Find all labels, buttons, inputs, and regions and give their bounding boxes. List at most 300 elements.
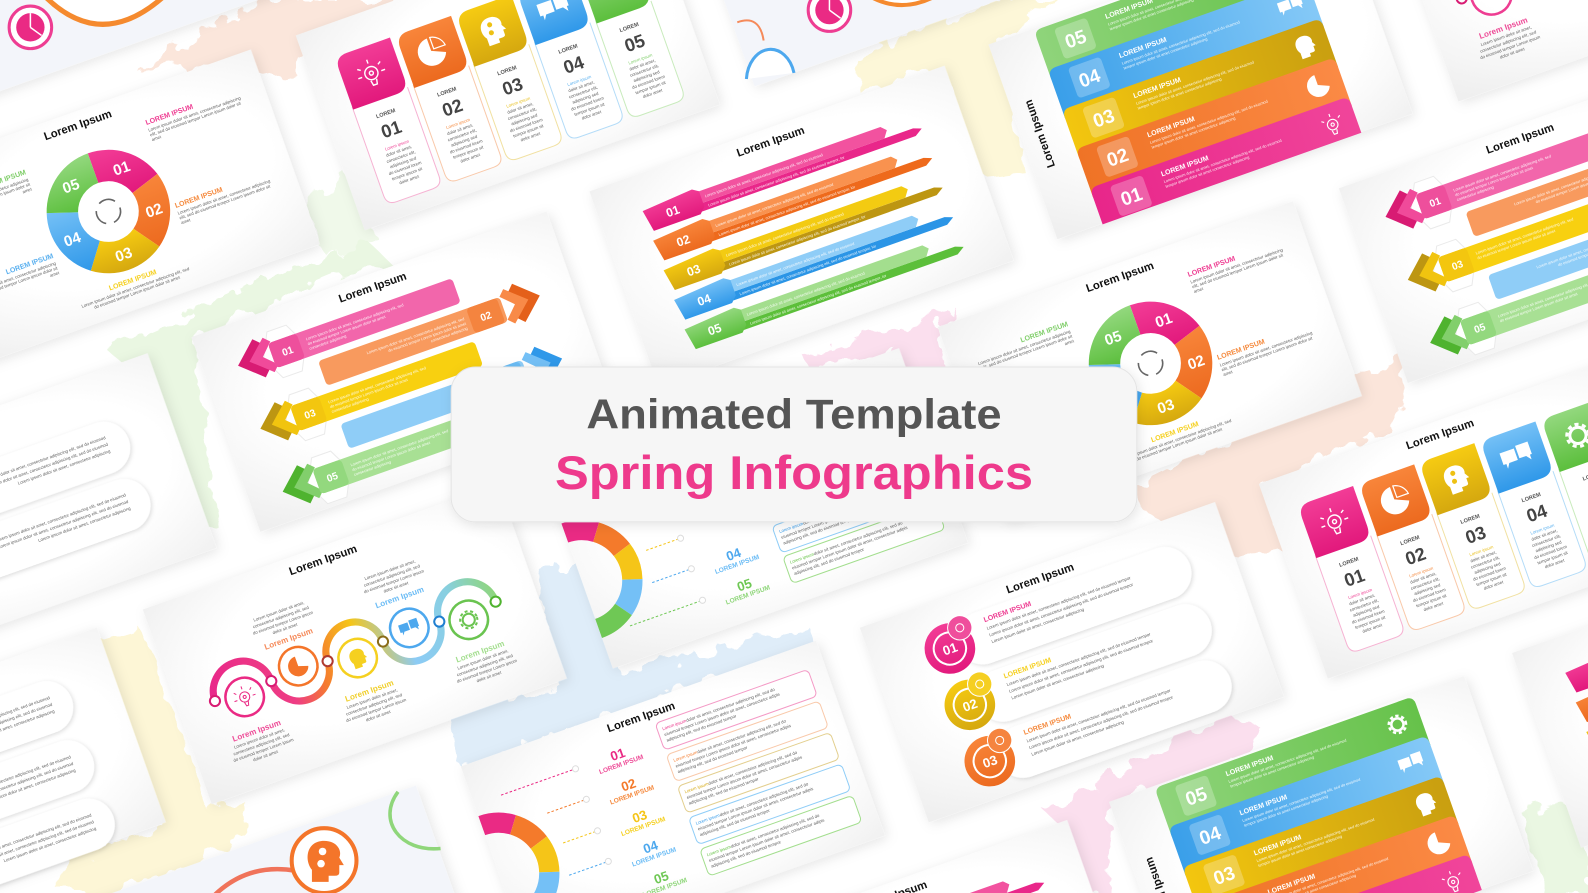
card 03: dolor amet	[520, 131, 542, 142]
card 04: adipiscing sed	[1535, 539, 1563, 553]
band 03	[1062, 18, 1338, 158]
row 05: consectetur adipiscing	[353, 459, 392, 477]
slide: colored stack bottom	[1109, 676, 1533, 893]
slide: top center circles fragment	[686, 0, 1110, 86]
card 03: consectetur elit,	[507, 106, 537, 121]
label 05: amet	[22, 186, 33, 194]
label 02: elit, sed do eiusmod tempor Lorem ipsum dolor sit	[179, 183, 272, 220]
card 02: dolor amet	[1423, 600, 1445, 612]
label 04: LOREM IPSUM	[5, 252, 55, 276]
donut chart: 04	[1104, 381, 1126, 403]
outlined box 01: adipiscing elit, sed do eiusmod tempor	[666, 713, 737, 743]
donut chart: 02	[1186, 352, 1207, 374]
label 01: Lorem ipsum dolor sit amet, consectetur adipiscing	[1190, 247, 1284, 285]
label 01	[1187, 238, 1287, 294]
labels: LOREM IPSUM	[620, 816, 667, 838]
slide: pills left upper	[0, 353, 216, 674]
card 02: dolor sit amet,	[1409, 571, 1437, 585]
card 02: 02	[440, 95, 465, 121]
bar 03	[662, 170, 945, 291]
pill 2: Lorem ipsum dolor sit amet, consectetur adipiscing	[37, 505, 132, 543]
card 05	[578, 0, 686, 119]
band 01: tempor ipsum dolor sit amet consectetur adipiscing	[1165, 155, 1250, 189]
row 03: consectetur adipiscing	[331, 396, 369, 414]
row 01	[1378, 119, 1588, 242]
outlined box 02: eiusmod tempor Lorem ipsum dolor sit amet, consectetur adipis	[675, 723, 792, 769]
card 04	[1480, 422, 1588, 589]
card 01: do eiusmod lorem	[1351, 608, 1386, 625]
outlined box 04: adipiscing elit, sed do eiusmod tempor	[699, 808, 771, 837]
text block: dolor sit amet	[1499, 46, 1526, 60]
band 04	[1168, 735, 1444, 876]
card 05: Lorem ipsum	[628, 52, 653, 66]
band 03: LOREM IPSUM	[1132, 76, 1182, 100]
slide: ring list bottom	[461, 641, 885, 893]
label 2	[248, 598, 320, 654]
card 01: Lorem ipsum	[1347, 587, 1373, 600]
bar 05: 05	[706, 321, 724, 339]
card 04: LOREM	[558, 43, 579, 56]
card 04: dolor sit amet,	[1531, 528, 1558, 542]
band 05: Lorem ipsum dolor sit amet, consectetur adipiscing elit, sed do eiusmod	[1228, 738, 1347, 784]
label 02	[174, 170, 275, 225]
label 03: LOREM IPSUM	[1150, 420, 1200, 444]
band 01: Lorem ipsum dolor sit amet, consectetur adipiscing elit, sed do eiusmod	[1163, 138, 1282, 184]
label 03: Lorem ipsum dolor sit amet, consectetur adipiscing elit, sed	[81, 266, 190, 309]
row 01: do eiusmod tempor Lorem ipsum dolor sit amet	[307, 314, 387, 346]
heading: Lorem Ipsum	[337, 270, 408, 306]
label 3: Lorem ipsum dolor sit amet,	[346, 687, 398, 710]
slide: wave timeline	[143, 484, 567, 804]
text block: Lorem ipsum dolor sit amet,	[1480, 25, 1532, 47]
outlined box 01: Lorem ipsum	[662, 718, 687, 731]
text block: consectetur adipiscing elit, sed	[1479, 29, 1537, 54]
step 5 icon	[444, 595, 493, 644]
label 02: Lorem ipsum dolor sit amet, consectetur adipiscing	[177, 178, 271, 216]
outlined box 05	[783, 503, 945, 584]
donut chart	[1072, 285, 1229, 442]
row 05: do eiusmod tempor Lorem ipsum dolor sit amet	[1499, 291, 1579, 323]
bar 03: Lorem ipsum dolor sit amet, consectetur adipiscing elit, sed do eiusmod tempor, lor	[728, 214, 867, 267]
card 03: do eiusmod lorem	[509, 117, 544, 133]
outlined box 04: adipiscing elit, sed do eiusmod tempor	[782, 516, 854, 546]
row 04: 04	[501, 373, 516, 387]
outlined box 02: adipiscing elit, sed do eiusmod tempor	[677, 745, 749, 774]
text block: do eiusmod tempor Lorem ipsum	[1479, 34, 1541, 60]
outlined box 03	[677, 732, 840, 813]
label 3	[338, 676, 409, 729]
title line 1: Animated Template	[586, 390, 1002, 437]
icon: blue arc	[746, 49, 794, 79]
bar 01: Lorem ipsum dolor sit amet, consectetur adipiscing elit, sed do eiusmod tempor, lor	[707, 154, 846, 208]
card 02: Lorem ipsum	[1408, 565, 1434, 579]
dashed leaders	[501, 770, 605, 888]
band 03: Lorem ipsum dolor sit amet, consectetur adipiscing elit, sed do eiusmod	[1256, 817, 1375, 863]
band 02: tempor ipsum dolor sit amet consectetur adipiscing	[1151, 115, 1236, 150]
pill 02: Lorem ipsum dolor sit amet, consectetur adipiscing elit, sed do eiusmod tempor	[1006, 631, 1152, 687]
row 03: do eiusmod tempor Lorem ipsum dolor sit amet	[329, 377, 409, 409]
pill 1	[0, 415, 137, 547]
label 4: Lorem ipsum dolor sit amet,	[364, 559, 416, 581]
pill 01: Lorem ipsum dolor sit amet, consectetur adipiscing elit, sed do eiusmod tempor	[986, 575, 1132, 631]
card 01: consectetur elit,	[386, 149, 416, 164]
card 05: dolor amet	[642, 87, 664, 99]
card 04: 04	[561, 52, 587, 78]
icon: small orange arc	[737, 20, 764, 40]
label 05	[0, 168, 33, 224]
icon: pink pie ring	[9, 6, 52, 49]
card 03: dolor sit amet,	[506, 101, 534, 115]
pill 01: 01	[941, 639, 959, 659]
label 01: elit, sed do eiusmod tempor Lorem ipsum dolor sit	[1191, 252, 1284, 289]
label 1: Lorem Ipsum	[231, 718, 282, 744]
bar 01	[641, 110, 924, 232]
pill 2	[0, 472, 158, 605]
row 03: do eiusmod tempor Lorem ipsum dolor sit amet	[1477, 228, 1557, 260]
slide: numbered pills	[860, 502, 1284, 822]
band 04: Lorem ipsum dolor sit amet, consectetur adipiscing elit, sed do eiusmod	[1121, 19, 1240, 66]
card 05: consectetur elit,	[629, 63, 660, 78]
label 01: amet	[1193, 286, 1205, 294]
card 04: tempor ipsum sit	[574, 101, 606, 117]
heading: Lorem Ipsum	[1405, 417, 1476, 452]
bar 05: Lorem ipsum dolor sit amet, consectetur adipiscing elit, sed do eiusmod tempor, lor	[749, 273, 888, 326]
labels: 05	[735, 575, 754, 594]
labels: LOREM IPSUM	[714, 554, 761, 576]
card 01: 01	[1342, 565, 1367, 591]
card 04: consectetur elit,	[568, 85, 598, 100]
donut chart: 03	[113, 244, 135, 266]
label 01: LOREM IPSUM	[145, 103, 194, 127]
dashed leaders	[608, 539, 700, 626]
slide: arrows right	[1339, 63, 1588, 383]
card 03	[456, 0, 564, 162]
icon: pink pie ring	[808, 0, 851, 31]
step 1 icon	[220, 672, 269, 722]
band 04: LOREM IPSUM	[1118, 36, 1168, 60]
outlined box 01: eiusmod tempor Lorem ipsum dolor sit amet, consectetur adipis	[664, 691, 781, 737]
band 05: 05	[1062, 26, 1090, 53]
row 03: 03	[303, 408, 318, 422]
label 5: Lorem ipsum dolor sit amet,	[457, 648, 509, 671]
band 02: 02	[1104, 145, 1132, 172]
label 1: consectetur adipiscing elit, sed	[233, 732, 291, 756]
card 02: consectetur elit,	[1410, 576, 1440, 591]
donut chart: 02	[143, 200, 165, 222]
wave path	[205, 574, 506, 729]
band 05: LOREM IPSUM	[1225, 754, 1275, 778]
label 03: do eiusmod tempor Lorem ipsum dolor sit amet	[93, 274, 181, 310]
card 03: adipiscing sed	[510, 112, 539, 126]
card 02	[396, 16, 503, 183]
band 02: LOREM IPSUM	[1146, 115, 1196, 139]
pill 03: Lorem ipsum dolor sit amet, consectetur adipiscing elit, sed do eiusmod tempor	[1026, 688, 1172, 743]
pill 03: Lorem ipsum dolor sit amet, consectetur adipiscing	[1031, 719, 1125, 757]
row 01: consectetur adipiscing	[309, 333, 347, 351]
row 03	[253, 331, 487, 454]
labels: LOREM IPSUM	[598, 754, 645, 776]
card 04: do eiusmod lorem	[1533, 544, 1568, 560]
card 04: LOREM	[1521, 492, 1542, 504]
slide: five cards right	[1259, 358, 1588, 679]
tab 02	[1574, 679, 1588, 723]
card 03: tempor ipsum sit	[1476, 571, 1508, 587]
donut chart	[30, 133, 187, 290]
band 04: tempor ipsum dolor sit amet consectetur adipiscing	[1123, 36, 1208, 71]
bar 03: Lorem ipsum dolor sit amet, consectetur adipiscing elit, sed do eiusmod	[725, 211, 844, 258]
card 03	[1419, 443, 1527, 611]
label 3: Lorem Ipsum	[344, 678, 395, 704]
card 03: tempor ipsum sit	[512, 123, 545, 139]
row 01: Lorem ipsum dolor sit amet, consectetur adipiscing elit, sed	[305, 302, 404, 341]
label 4	[359, 557, 431, 612]
card 03: dolor amet	[1483, 579, 1505, 591]
bar 04: 04	[696, 291, 713, 309]
card 04: dolor amet	[1544, 557, 1566, 569]
label 1: do eiusmod tempor Lorem ipsum	[233, 737, 295, 763]
outlined box 05: eiusmod tempor Lorem ipsum dolor sit amet, consectetur adipis	[708, 817, 826, 863]
card 03: do eiusmod lorem	[1472, 565, 1507, 582]
outlined box 04: Lorem ipsum	[695, 813, 721, 826]
pill 01: LOREM IPSUM	[983, 600, 1032, 624]
labels	[593, 739, 689, 893]
outlined box 05: eiusmod tempor Lorem ipsum dolor sit amet, consectetur adipis	[791, 525, 909, 570]
pill 2	[0, 733, 101, 866]
card 02: adipiscing sed	[1413, 582, 1442, 596]
text block	[1472, 13, 1543, 66]
icon: orange head ring	[292, 828, 356, 893]
card 05: adipiscing sed	[633, 69, 661, 83]
tab 01	[1564, 649, 1588, 694]
pill 1: Lorem ipsum dolor sit amet, consectetur adipiscing	[17, 448, 111, 486]
row 02: consectetur adipiscing	[430, 326, 468, 343]
slide: ribbon bars center	[589, 66, 1014, 386]
heading: Lorem Ipsum	[1485, 122, 1556, 157]
outlined box 02: Lorem ipsum	[673, 750, 698, 763]
band 03	[1183, 776, 1459, 893]
card 03: 03	[1463, 522, 1489, 548]
outlined box 03: Lorem ipsum	[684, 781, 710, 794]
leader dots	[572, 765, 612, 865]
outlined box 04	[689, 764, 851, 845]
card 01: 01	[378, 117, 404, 142]
label 2: do eiusmod tempor Lorem ipsum	[252, 610, 314, 636]
label 1	[225, 716, 297, 769]
bar 05	[683, 229, 966, 351]
outlined box 04: dolor sit amet, consectetur adipiscing elit, sed do	[802, 489, 893, 526]
card 01: Lorem ipsum	[384, 139, 410, 152]
card 02: LOREM	[437, 86, 458, 99]
icon: orange arc	[47, 0, 162, 24]
card 01: dolor amet	[1362, 622, 1383, 634]
donut chart: 05	[60, 176, 82, 198]
card 03: Lorem ipsum	[1469, 544, 1494, 557]
bar 04	[673, 199, 956, 321]
icon: orange arc top	[873, 0, 932, 5]
label 2: dolor sit amet	[272, 622, 299, 635]
card 01: adipiscing sed	[389, 155, 417, 169]
row 02	[315, 276, 547, 392]
band 02: Lorem ipsum dolor sit amet, consectetur adipiscing elit, sed do eiusmod	[1149, 99, 1268, 145]
pill 01	[917, 537, 1199, 683]
label 01: Lorem ipsum dolor sit amet, consectetur adipiscing	[148, 95, 242, 133]
label 3: consectetur adipiscing elit, sed	[345, 692, 403, 717]
row 01	[231, 268, 465, 391]
card 01	[335, 38, 442, 205]
label 02: LOREM IPSUM	[174, 186, 224, 210]
row 02: 02	[479, 310, 494, 324]
outlined box 04: eiusmod tempor Lorem ipsum dolor sit amet, consectetur adipis	[697, 786, 815, 831]
row 05	[275, 394, 509, 517]
pill 02: 02	[961, 696, 979, 715]
center title panel	[451, 367, 1137, 522]
card 02: Lorem ipsum	[445, 117, 471, 130]
card 02: do eiusmod lorem	[449, 138, 484, 155]
card 01: dolor sit amet,	[385, 144, 413, 158]
outlined box 05: Lorem ipsum	[789, 551, 815, 565]
slide: top-right wave fragment	[1390, 0, 1588, 102]
label 2: Lorem Ipsum	[263, 626, 314, 652]
pill 03: LOREM IPSUM	[1023, 712, 1072, 737]
labels: LOREM IPSUM	[609, 784, 656, 807]
card 02: dolor sit amet,	[446, 122, 474, 136]
outlined box 04: eiusmod tempor Lorem ipsum dolor sit amet, consectetur adipis	[780, 494, 898, 540]
bar 04: Lorem ipsum dolor sit amet, consectetur adipiscing elit, sed do eiusmod	[736, 241, 855, 287]
bar 01	[818, 868, 1046, 893]
label 4: dolor sit amet	[383, 580, 410, 594]
row 01: do eiusmod tempor Lorem ipsum dolor sit amet	[1454, 165, 1534, 197]
outlined box 02: dolor sit amet, consectetur adipiscing elit, sed do	[697, 718, 787, 754]
band 04: tempor ipsum dolor sit amet consectetur adipiscing	[1243, 794, 1329, 828]
band 03: Lorem ipsum dolor sit amet, consectetur adipiscing elit, sed do eiusmod	[1135, 59, 1255, 106]
outlined box 01: dolor sit amet, consectetur adipiscing elit, sed do	[685, 687, 776, 723]
card 04: adipiscing sed	[572, 91, 600, 105]
row 03: Lorem ipsum dolor sit amet, consectetur adipiscing elit, sed	[327, 365, 427, 404]
band 04	[1048, 0, 1324, 118]
band 05: 05	[1183, 784, 1210, 811]
donut chart: 01	[1153, 310, 1175, 331]
card 05: LOREM	[619, 22, 640, 34]
card 01: adipiscing sed	[1352, 604, 1380, 618]
card 03: 03	[500, 74, 525, 99]
outlined box 05	[700, 795, 862, 876]
card 04: Lorem ipsum	[1530, 522, 1555, 536]
slide: colored stack top	[988, 0, 1413, 240]
card 04: dolor amet	[581, 109, 603, 121]
slide: ribbon bars bottom fragment	[712, 820, 1136, 893]
outlined box 04	[772, 472, 934, 553]
card 02: tempor ipsum sit	[1415, 593, 1448, 608]
band 05	[1155, 696, 1430, 837]
pill 01: Lorem ipsum dolor sit amet, consectetur adipiscing elit, sed do eiusmod tempor	[988, 582, 1134, 637]
pill 3: Lorem ipsum dolor sit amet, consectetur adipiscing	[3, 826, 97, 863]
card 01: tempor ipsum sit	[1354, 614, 1387, 630]
pill 2: Lorem ipsum dolor sit amet, consectetur adipiscing elit, sed do eiusmod	[0, 499, 129, 550]
card 05: dolor sit amet,	[629, 58, 656, 72]
label 5: dolor sit amet	[476, 670, 503, 683]
slide: donut chart center	[938, 201, 1362, 522]
card 04: tempor ipsum sit	[1537, 550, 1569, 565]
heading: Lorem Ipsum	[606, 700, 677, 735]
label 05	[974, 320, 1075, 376]
label 01	[145, 87, 245, 142]
labels: 04	[724, 545, 744, 564]
card 03: dolor sit amet,	[1470, 550, 1497, 563]
card 04: 04	[1524, 500, 1551, 526]
pill 03	[956, 650, 1239, 796]
label 02	[1216, 321, 1317, 377]
label 03: Lorem ipsum dolor sit amet, consectetur adipiscing elit, sed	[1123, 418, 1233, 461]
label 01: elit, sed do eiusmod tempor Lorem ipsum dolor sit	[149, 100, 242, 137]
row 01: 01	[1428, 196, 1443, 210]
donut chart: 01	[111, 158, 133, 180]
card 04: dolor sit amet,	[568, 79, 595, 93]
outlined box 03: dolor sit amet, consectetur adipiscing elit, sed do	[708, 750, 798, 786]
row 05: 05	[1473, 322, 1488, 336]
bar 01: Lorem ipsum dolor sit amet, consectetur adipiscing elit, sed do eiusmod	[704, 152, 823, 198]
band 05: tempor ipsum dolor sit amet consectetur adipiscing	[1229, 754, 1315, 789]
donut chart: 04	[62, 229, 84, 251]
outlined box 03: eiusmod tempor Lorem ipsum dolor sit amet, consectetur adipis	[686, 754, 804, 800]
ring chart	[478, 796, 576, 893]
label 03: do eiusmod tempor Lorem ipsum dolor sit amet	[1135, 426, 1223, 462]
bar 03: 03	[685, 262, 703, 279]
pill 3	[0, 791, 122, 893]
pill 02: LOREM IPSUM	[1003, 656, 1052, 680]
band 01: LOREM IPSUM	[1160, 154, 1210, 178]
card 03: LOREM	[497, 65, 518, 77]
card 01: dolor amet	[399, 173, 420, 185]
label 1: dolor sit amet	[252, 749, 279, 762]
icon: coral arc	[215, 869, 296, 893]
bar 04: Lorem ipsum dolor sit amet, consectetur adipiscing elit, sed do eiusmod tempor, lor	[739, 243, 877, 296]
labels: LOREM IPSUM	[631, 846, 678, 869]
band 04: LOREM IPSUM	[1239, 793, 1288, 817]
card 02: LOREM	[1400, 535, 1421, 547]
label 3: dolor sit amet	[365, 709, 392, 722]
outlined box 05: dolor sit amet, consectetur adipiscing elit, sed do	[730, 813, 821, 849]
card 01: LOREM	[1339, 556, 1360, 569]
slide: top-left circles fragment	[0, 0, 325, 102]
band 05	[1034, 0, 1310, 79]
card 04: do eiusmod lorem	[570, 95, 605, 112]
bar 05: Lorem ipsum dolor sit amet, consectetur adipiscing elit, sed do eiusmod	[746, 270, 865, 317]
labels: 04	[641, 837, 661, 857]
card 05: do eiusmod lorem	[631, 74, 666, 90]
label 5	[449, 637, 520, 690]
wave rings	[209, 595, 502, 707]
outlined box 04: dolor sit amet, consectetur adipiscing elit, sed do	[719, 781, 809, 817]
outlined box 01	[655, 669, 817, 750]
slide: bottom circles fragment	[61, 785, 485, 893]
row 04	[338, 339, 569, 455]
wave icon	[1452, 0, 1517, 25]
donut chart: 03	[1155, 396, 1177, 418]
card 01: consectetur elit,	[1349, 598, 1379, 613]
label 4: do eiusmod tempor Lorem ipsum	[363, 568, 425, 594]
row 03	[1400, 182, 1588, 305]
outlined box 05: Lorem ipsum	[706, 844, 732, 857]
band 03: 03	[1090, 106, 1118, 133]
text block: Lorem Ipsum	[1478, 15, 1529, 41]
label 3: do eiusmod tempor Lorem ipsum	[345, 697, 407, 723]
title line 2: Spring Infographics	[555, 447, 1033, 500]
label 05: amet	[1064, 338, 1075, 346]
pill 1	[0, 674, 80, 806]
row 02	[1466, 148, 1588, 237]
heading: Lorem Ipsum	[288, 543, 359, 578]
pill 02	[937, 593, 1219, 740]
